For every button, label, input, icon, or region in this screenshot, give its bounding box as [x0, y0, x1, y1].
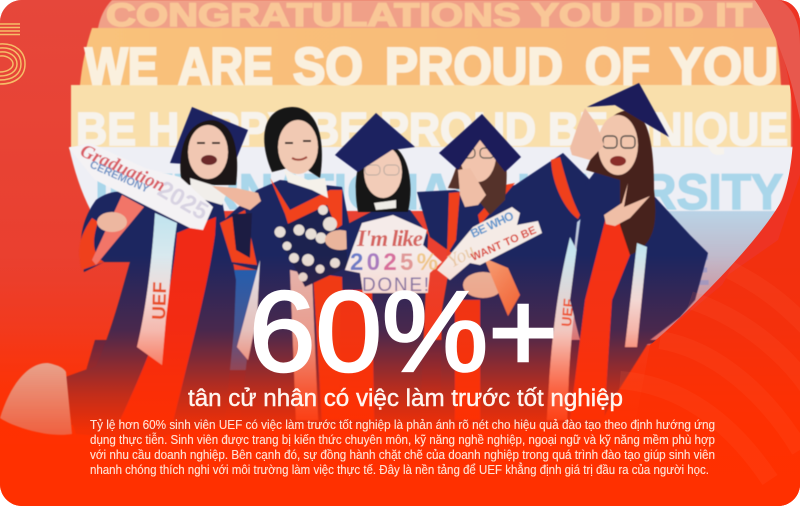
graduate 1 — [57, 107, 248, 440]
backdrop heading: proud: PROUD — [385, 38, 563, 96]
backdrop heading: proud — [85, 38, 778, 96]
glasses — [603, 136, 635, 148]
long gown — [417, 153, 607, 420]
eyes — [197, 142, 220, 144]
eyes — [285, 141, 311, 143]
red panel — [570, 213, 630, 420]
sash label: UEF — [149, 281, 171, 320]
sign text: be who: BE WHO — [468, 209, 516, 241]
sign: graduation ceremony — [69, 140, 213, 230]
sign text: ceremony: CEREMONY — [88, 159, 151, 196]
collar — [374, 200, 396, 210]
gown — [570, 165, 708, 420]
blue sash left — [237, 260, 260, 360]
face — [598, 115, 638, 175]
inner sleeve dark — [232, 213, 252, 258]
face — [278, 120, 318, 174]
cap — [439, 114, 521, 172]
hand — [458, 168, 486, 207]
bottom red fade — [0, 255, 800, 506]
red right trim — [478, 183, 515, 225]
description paragraph: với nhu cầu doanh nghiệp. Bên cạnh đó, sự đồng hành chặt chẽ của doanh nghiệp trong quá trình đào tạo giúp sinh viên — [90, 448, 715, 462]
V-sign hand — [604, 183, 650, 226]
right-side red shapes — [620, 0, 800, 506]
sign text: I'm like: I'm like — [356, 226, 423, 251]
red lower robe — [455, 300, 480, 420]
sign text: want to be: WANT TO BE — [469, 224, 538, 264]
backdrop heading: proud: SO — [293, 38, 363, 96]
sign text: 2025%: 2025% — [350, 249, 438, 276]
red collar trim — [447, 192, 460, 255]
decorated cap board — [275, 205, 352, 287]
long hair — [586, 110, 655, 255]
collar — [190, 178, 228, 205]
top right red curve — [650, 0, 800, 506]
description paragraph: dụng thực tiễn. Sinh viên được trang bị kiến thức chuyên môn, kỹ năng nghề nghiệp, ngoại ngữ và kỹ năng mềm phù hợp — [90, 432, 715, 447]
mouth — [610, 156, 626, 166]
glasses — [461, 148, 494, 158]
red lower robe — [340, 290, 374, 420]
backdrop heading: proud: OF — [585, 38, 650, 96]
backdrop heading: proud: YOU — [670, 38, 778, 96]
sign: 2025% done — [345, 215, 442, 296]
sash — [547, 237, 583, 420]
graduate 2 — [212, 107, 355, 420]
gown body — [222, 180, 350, 420]
shoe — [0, 363, 72, 435]
face — [460, 128, 496, 182]
backdrop band: cream — [71, 85, 791, 147]
sign text: 2025: 2025 — [153, 176, 213, 226]
gown body — [57, 182, 236, 440]
hair — [356, 143, 410, 212]
face — [188, 125, 228, 179]
cap — [170, 107, 248, 167]
left sleeve red — [220, 210, 257, 265]
sign text: graduation: Graduation — [77, 140, 168, 197]
hair — [180, 120, 237, 185]
hand on board — [325, 230, 355, 250]
red trim — [270, 178, 342, 240]
gown — [346, 210, 428, 420]
cap — [335, 113, 415, 172]
mouth — [201, 155, 217, 165]
sash — [625, 243, 647, 347]
backdrop band: salmon — [98, 0, 774, 28]
graduate 5 — [570, 83, 708, 420]
right red edge light — [755, 0, 800, 120]
face — [364, 146, 402, 198]
sash — [137, 213, 177, 365]
backdrop band: white — [69, 147, 795, 211]
gown red panel — [118, 217, 216, 425]
description paragraph — [90, 418, 715, 477]
white collar — [284, 170, 328, 198]
gown lower red — [313, 273, 346, 420]
sash label: UEF — [558, 298, 576, 327]
hand — [97, 212, 127, 232]
graduate 4 — [417, 114, 607, 420]
backdrop heading: lower: UE — [665, 246, 710, 295]
graduate 3 — [335, 113, 428, 420]
lower right wedge — [620, 175, 800, 506]
sleeve trim — [79, 218, 104, 270]
sign text: you: You — [444, 240, 479, 272]
sign: be who you want to be — [437, 207, 542, 280]
backdrop band: orange — [80, 28, 781, 85]
orange folder — [484, 258, 520, 316]
sash right — [290, 270, 318, 420]
backdrop heading: proud: ARE — [178, 38, 273, 96]
backdrop heading: university: INTERNATIONAL UNIVERSITY — [95, 164, 783, 220]
description paragraph: nhanh chóng thích nghi với môi trường làm việc thực tế. Đây là nền tảng để UEF khẳng định giá trị đầu ra của người học. — [90, 462, 709, 477]
pink folder — [92, 195, 144, 265]
mouth — [292, 157, 307, 160]
backdrop heading: proud: WE — [85, 38, 158, 96]
stage backdrop — [69, 0, 795, 345]
glasses — [365, 165, 399, 175]
sign text: done: DONE! — [362, 275, 429, 296]
raised hand — [570, 108, 604, 160]
hair — [448, 128, 507, 215]
decorative number 5 — [0, 24, 25, 84]
outstretched hand — [212, 186, 261, 210]
lower hand — [463, 272, 503, 298]
blue gap between graduates — [225, 270, 265, 370]
base of robes fading out — [70, 340, 680, 425]
curved stripes — [620, 270, 800, 480]
backdrop band: pale blue — [500, 211, 778, 345]
cap badges — [274, 205, 340, 282]
sleeve trim — [551, 157, 580, 219]
subtitle: tân cử nhân có việc làm trước tốt nghiệp — [188, 385, 623, 412]
graduates photo — [57, 83, 708, 440]
cap — [587, 83, 669, 137]
big number: 60%+ — [249, 269, 558, 396]
description paragraph: Tỷ lệ hơn 60% sinh viên UEF có việc làm trước tốt nghiệp là phản ánh rõ nét cho hiệu quả đào tạo theo định hướng ứng — [90, 418, 715, 432]
hair — [264, 107, 322, 178]
